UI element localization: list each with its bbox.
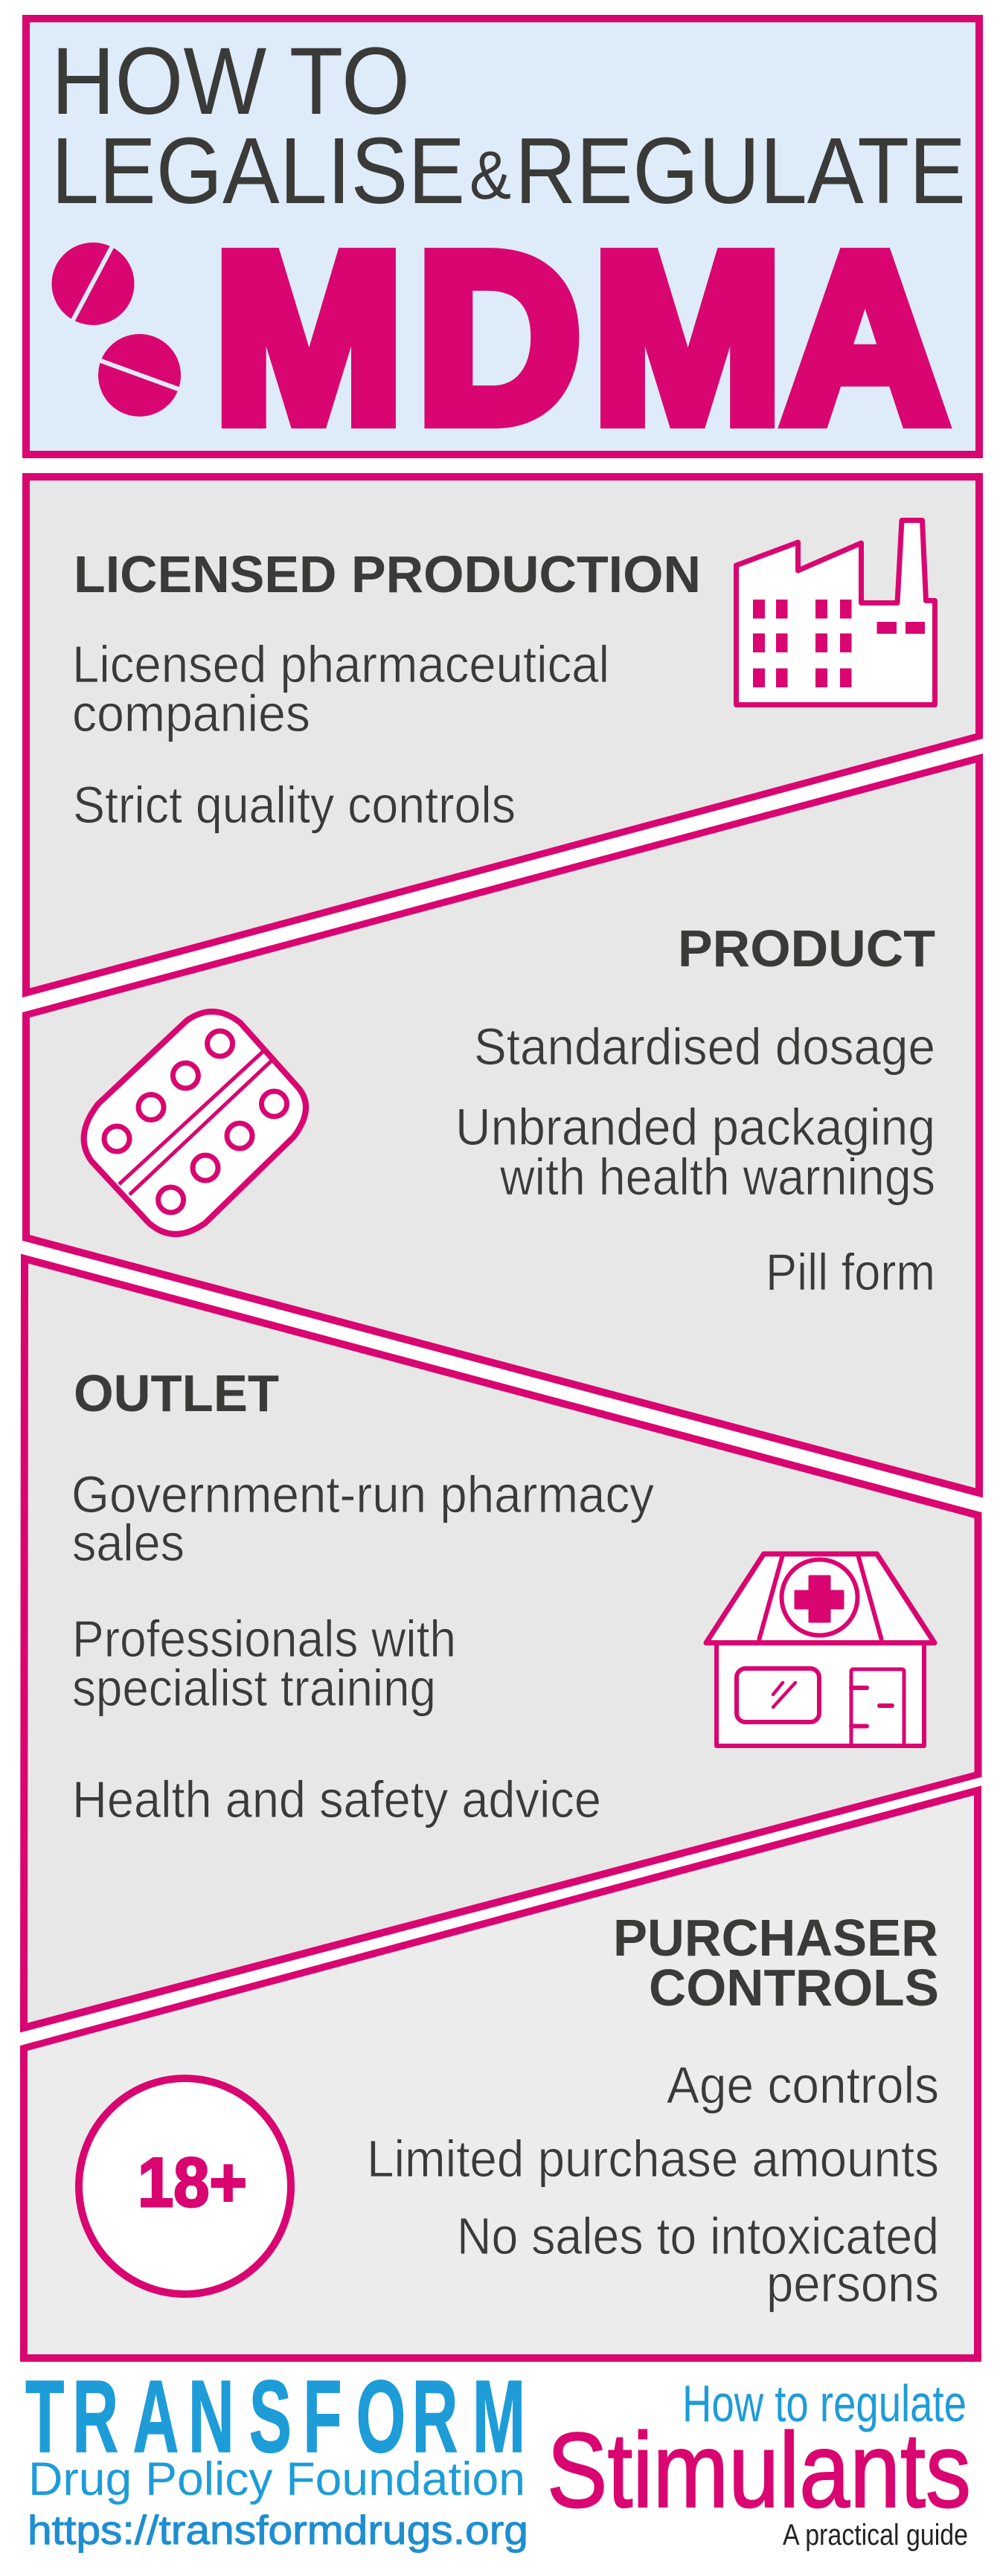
title: legalise and regulate: REGULATE [515,118,966,223]
text: unbranded packaging with health warnings: Unbranded packaging [455,1098,935,1156]
text: health and safety advice: Health and safety advice [72,1770,601,1828]
heading: purchaser controls [613,1909,939,2017]
footer: transform logo [25,2360,528,2553]
panel: purchaser controls [24,1790,978,2358]
text: licensed pharmaceutical companies [72,635,609,742]
icon: pharmacy [706,1554,935,1746]
heading: purchaser controls: PURCHASER [613,1909,938,1967]
title: legalise and regulate [51,118,966,223]
icon: blister pack [84,1012,306,1234]
text: professionals with specialist training: Professionals with [72,1610,456,1668]
text: pill form: Pill form [766,1243,935,1301]
panel: regulation sections [20,477,983,2358]
text: no sales to intoxicated persons: persons [766,2255,939,2313]
text: licensed pharmaceutical companies: Licensed pharmaceutical [72,635,609,693]
title: how to: HOW TO [51,28,410,135]
title: MDMA: MDMA [214,205,947,472]
heading: product: PRODUCT [678,919,935,977]
text: age controls: Age controls [667,2056,939,2114]
text: government-run pharmacy sales [71,1465,654,1572]
text: unbranded packaging with health warnings: with health warnings [499,1148,935,1206]
text: professionals with specialist training: specialist training [72,1659,436,1717]
heading: outlet: OUTLET [74,1364,279,1422]
text: professionals with specialist training [72,1610,456,1717]
text: strict quality controls: Strict quality controls [73,776,516,834]
heading: purchaser controls: CONTROLS [649,1959,939,2017]
logo subtitle: Drug Policy Foundation [28,2453,525,2505]
text: unbranded packaging with health warnings [455,1098,935,1206]
text: no sales to intoxicated persons [457,2207,939,2313]
divider bands [20,739,983,2046]
panel: outlet [24,1259,978,2028]
text: licensed pharmaceutical companies: companies [72,684,310,742]
a practical guide: A practical guide [783,2519,968,2551]
icon: 18+ badge [79,2078,291,2294]
title: legalise and regulate: & [469,138,511,213]
text: no sales to intoxicated persons: No sales to intoxicated [457,2207,939,2265]
icon: factory [737,521,935,705]
title panel [26,19,979,472]
heading: licensed production: LICENSED PRODUCTION [74,545,701,603]
website url: https://transformdrugs.org [28,2507,528,2553]
text: limited purchase amounts: Limited purchase amounts [367,2130,939,2188]
text: government-run pharmacy sales: Government-run pharmacy [71,1465,654,1523]
footer: guide title [547,2374,971,2551]
panel: licensed production [26,477,979,993]
text: standardised dosage: Standardised dosage [474,1018,935,1076]
title: legalise and regulate: LEGALISE [51,118,465,223]
text: government-run pharmacy sales: sales [72,1514,185,1572]
icon: 18+ badge: 18+ [138,2143,247,2221]
panel: product [26,758,979,1493]
logo wordmark: TRANSFORM [25,2360,525,2474]
icon: two pills [52,242,182,417]
